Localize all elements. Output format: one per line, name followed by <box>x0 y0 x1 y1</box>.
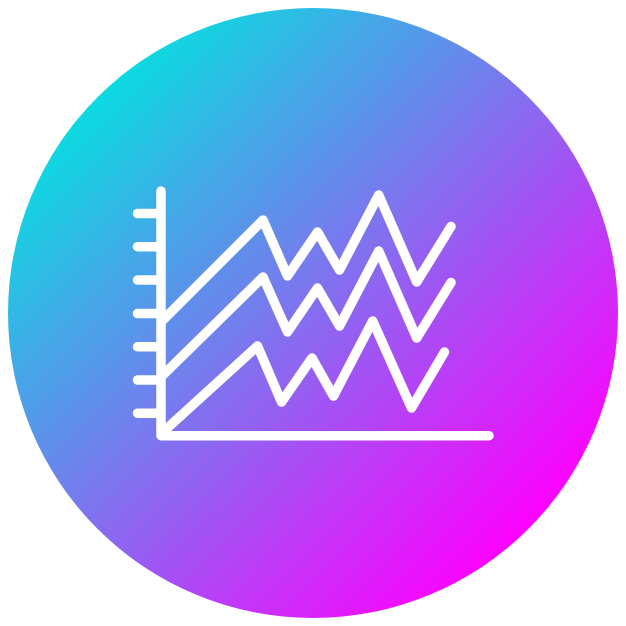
axes <box>161 191 489 436</box>
y-axis ticks <box>138 214 160 413</box>
bottom line <box>163 321 444 432</box>
top line <box>163 195 451 320</box>
middle line <box>163 251 451 375</box>
chart axes and lines <box>138 191 489 436</box>
